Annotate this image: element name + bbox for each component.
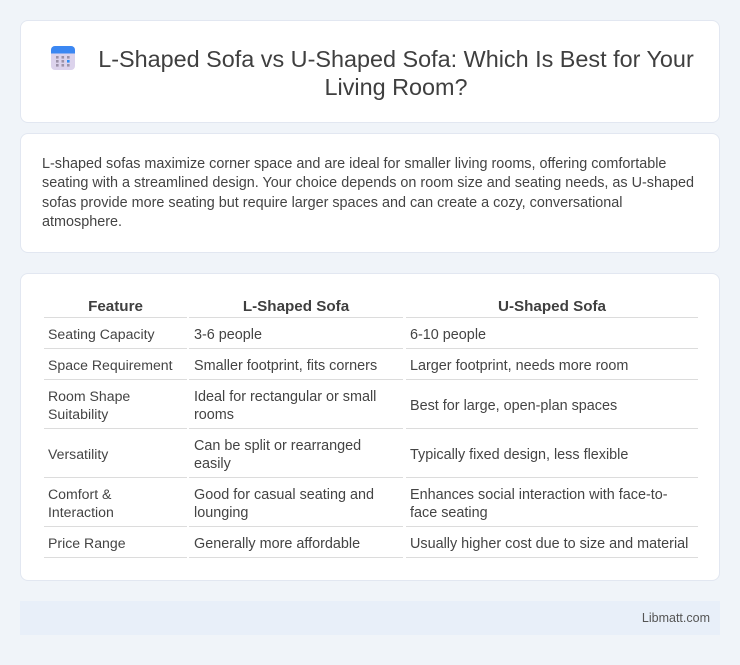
row: comfort and interaction: Comfort &: [48, 486, 111, 502]
row: seating capacity: 6-10 people: [410, 327, 486, 343]
panel: comparison table: [20, 273, 720, 581]
row: comfort and interaction: face seating: [410, 505, 488, 521]
row: room shape suitability: Ideal for rectangular or small: [194, 389, 376, 405]
row: comfort and interaction: Interaction: [48, 504, 114, 520]
row: room shape suitability: [48, 388, 617, 423]
row: versatility: easily: [194, 456, 231, 472]
row: space requirement: Smaller footprint, fits corners: [194, 358, 377, 374]
footer bar: [20, 601, 720, 635]
row: price range: Price Range: [48, 535, 126, 551]
row: versatility: [48, 438, 628, 472]
row: seating capacity: Seating Capacity: [48, 326, 155, 342]
table header: Feature: [88, 298, 143, 315]
row: price range: Usually higher cost due to size and material: [410, 536, 688, 552]
text block: intro paragraph: sofas provide more seating but require larger spaces and can create a cozy, conversational: [42, 195, 622, 211]
title: L-Shaped Sofa vs U-Shaped Sofa: Which Is Best for Your: [98, 46, 694, 72]
text block: intro paragraph: L-shaped sofas maximize corner space and are ideal for smaller living rooms, offering comfortable: [42, 156, 666, 172]
title: [98, 46, 694, 100]
icon: calendar: [51, 46, 75, 70]
text block: intro paragraph: [42, 156, 694, 230]
text block: intro paragraph: atmosphere.: [42, 214, 122, 230]
text block: intro paragraph: seating with a streamlined design. Your choice depends on room size and seating needs, as U-shaped: [42, 175, 694, 191]
row: room shape suitability: Room Shape: [48, 388, 130, 404]
row: room shape suitability: Suitability: [48, 406, 108, 422]
row: comfort and interaction: lounging: [194, 505, 248, 521]
panel: introduction: [20, 133, 720, 253]
row: comfort and interaction: Good for casual seating and: [194, 487, 374, 503]
row: price range: [48, 535, 688, 552]
row: space requirement: Larger footprint, needs more room: [410, 358, 628, 374]
row: price range: Generally more affordable: [194, 536, 360, 552]
row: seating capacity: 3-6 people: [194, 327, 262, 343]
row: space requirement: Space Requirement: [48, 357, 173, 373]
row: versatility: Can be split or rearranged: [194, 438, 361, 454]
row: space requirement: [48, 357, 628, 374]
title: Living Room?: [324, 74, 468, 100]
row: seating capacity: [48, 326, 486, 343]
panel: title card: [20, 20, 720, 123]
row: room shape suitability: Best for large, open-plan spaces: [410, 398, 617, 414]
table header: L-Shaped Sofa: [243, 298, 349, 315]
footer text: source: Libmatt.com: [642, 611, 710, 625]
row: comfort and interaction: Enhances social interaction with face-to-: [410, 487, 668, 503]
table header: [88, 298, 606, 315]
row: room shape suitability: rooms: [194, 407, 234, 423]
row: versatility: Typically fixed design, less flexible: [410, 447, 628, 463]
row: comfort and interaction: [48, 486, 668, 521]
row: versatility: Versatility: [48, 446, 108, 462]
table header: U-Shaped Sofa: [498, 298, 606, 315]
